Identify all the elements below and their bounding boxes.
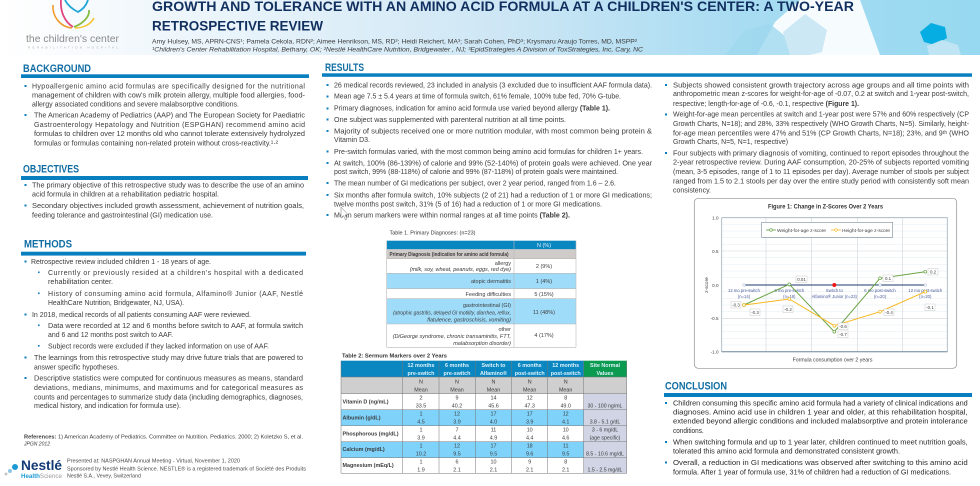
table 2 values: 1.9 xyxy=(417,468,425,474)
conclusion bullets: tolerated this amino acid formula and demonstrated consistent growth. xyxy=(673,449,900,456)
objectives bullets: Secondary objectives included growth assessment, achievement of nutrition goals, xyxy=(32,203,304,210)
results bullets, left column: Primary diagnoses, indication for amino acid formula use varied beyond allergy (Table 1). xyxy=(334,106,610,113)
methods bullets: History of consuming amino acid formula, Alfamino® Junior (AAF, Nestlé xyxy=(48,290,303,298)
table 1: primary diagnoses: 4 (17%) xyxy=(534,333,554,339)
conclusion bullets: conditions. xyxy=(673,428,704,435)
table 2 header row: Site Normal xyxy=(590,363,620,369)
table 2 row labels: Calcium (mg/dL) xyxy=(342,447,385,453)
table 2: serum markers xyxy=(341,354,627,474)
table 2 subheader row: Mean xyxy=(559,388,572,394)
table 2 values: 47.3 xyxy=(524,404,535,410)
table 2 values: 45.6 xyxy=(488,404,499,410)
table 2 values: 3.9 xyxy=(526,420,533,426)
table 2 header row xyxy=(408,363,620,377)
logo: nestle health science: Nestlé xyxy=(21,458,62,473)
y axis labels: -1.0 xyxy=(711,350,719,354)
table 1: primary diagnoses: gastrointestinal (GI) xyxy=(463,303,511,309)
table 2 row labels: Phosphorous (mg/dL) xyxy=(342,432,399,438)
footer disclosure: Sponsored by Nestlé Health Science. NESTLE® is a registered trademark of Société des Produits xyxy=(67,465,307,472)
authors and affiliations xyxy=(152,39,644,54)
table 2 header row: 12 months xyxy=(408,363,434,369)
conclusion bullets: Children consuming this specific amino acid formula had a variety of clinical indications and xyxy=(673,401,968,408)
methods bullets: counts and percentages to summarize study data (including demographics, diagnoses, xyxy=(34,394,303,401)
background bullets xyxy=(24,84,306,148)
table 1: primary diagnoses: malabsorption disorder) xyxy=(453,341,511,347)
results bullets, right column: ranged from 1.5 to 2.1 stools per day over the entire study period with consistently soft mean xyxy=(673,178,969,185)
data value callouts: 0.2 xyxy=(930,270,937,274)
x axis point labels: Alfamino® Junior (n=23) xyxy=(812,294,858,299)
table 2 values: 10 xyxy=(527,428,533,434)
table 2 values: 1 xyxy=(420,428,422,434)
table 2 row labels: Magnesium (mEq/L) xyxy=(342,463,394,469)
methods bullets: rehabilitation center. xyxy=(48,279,113,286)
x axis point labels: 12 mo post-switch xyxy=(908,288,943,293)
methods bullets: HealthCare Nutrition, Bridgewater, NJ, USA). xyxy=(48,300,184,307)
table 2 row labels: Vitamin D (ng/mL) xyxy=(342,400,389,406)
y axis labels: 0.0 xyxy=(712,283,719,288)
table 2 values: 11 xyxy=(563,444,569,450)
y axis title: z-score xyxy=(704,277,710,293)
results bullets, right column: Four subjects with primary diagnosis of vomiting, continued to report episodes throughout the xyxy=(673,150,969,157)
results bullets, left column: Pre-switch formulas varied, with the most common being amino acid formulas for children 1+ years. xyxy=(334,149,643,156)
table 1: primary diagnoses: N (%) xyxy=(537,243,551,249)
results bullets, right column: consistency. xyxy=(673,188,711,195)
header banner xyxy=(0,0,980,55)
table 1: primary diagnoses: Primary Diagnosis (indication for amino acid formula) xyxy=(390,252,509,258)
icon: mouse cursor xyxy=(341,207,348,220)
table 2 subheader row: Mean xyxy=(450,388,464,394)
methods bullets: The learnings from this retrospective study may drive future trials that are powered to xyxy=(34,355,303,362)
table 2 values: 9.5 xyxy=(490,452,497,458)
data value callouts: -0.1 xyxy=(926,305,934,310)
table 1: primary diagnoses: 11 (48%) xyxy=(533,310,555,316)
background bullets: management of children with cow's milk protein allergy, multiple food allergies, food- xyxy=(32,92,306,100)
title xyxy=(152,0,854,34)
results bullets, right column xyxy=(665,82,970,195)
results bullets, left column xyxy=(326,82,653,219)
table 2 header row: 12 months xyxy=(552,363,579,369)
logo: nestle health science: HealthScience xyxy=(21,474,63,480)
methods bullets: answer specific hypotheses. xyxy=(34,364,119,371)
results bullets, right column: respective; length-for-age of -0.6, -0.1, respective (Figure 1). xyxy=(673,101,859,108)
table 2 values: 2.1 xyxy=(490,468,497,474)
results bullets, left column: The mean number of GI medications per subject, over 2 year period, ranged from 1.6 – 2.6. xyxy=(334,180,616,187)
table 2 values: 9.6 xyxy=(526,452,533,458)
objectives bullets xyxy=(24,183,304,219)
background bullets: Gastroenterology Hepatology and Nutrition (ESPGHAN) recommend amino acid xyxy=(34,122,305,129)
table 2 values: 4.9 xyxy=(490,436,497,442)
logo: the children's center xyxy=(26,0,120,50)
background bullets: allergy associated conditions and severe malabsorptive conditions. xyxy=(32,102,239,108)
table 1: primary diagnoses: (DiGeorge syndrome, chronic transaminitis, FTT, xyxy=(393,334,511,340)
results bullets, left column: Six months after formula switch, 10% subjects (2 of 21) had a reduction of 1 or more GI medications; xyxy=(334,192,652,199)
table 2 values: 12 xyxy=(454,412,460,418)
y axis labels xyxy=(711,216,719,354)
table 2 values: 1 xyxy=(420,412,422,418)
table 2 normal values: 3.8 - 5.1 g/dL xyxy=(590,420,620,426)
methods bullets: deviations, medians, minimums, and maximums and for categorical measures as xyxy=(34,385,304,392)
results bullets, left column: One subject was supplemented with parenteral nutrition at all time points. xyxy=(334,117,566,124)
x axis point labels: (n=18) xyxy=(783,294,796,299)
results bullets, left column: At switch, 100% (86-139%) of calorie and 99% (52-140%) of protein goals were achieved. One year xyxy=(334,160,653,167)
methods bullets: Descriptive statistics were computed for continuous measures as means, standard xyxy=(34,376,303,383)
table 2: serum markers: Table 2: Sermum Markers over 2 Years xyxy=(342,354,447,360)
table 2 values: 9 xyxy=(528,460,531,466)
table 2 values: 1 xyxy=(420,444,422,450)
table 2 values: 12 xyxy=(563,412,569,418)
table 2 subheader row: N xyxy=(528,380,532,386)
table 2 values: 8 xyxy=(564,396,567,402)
table 2 values: 4.4 xyxy=(453,436,461,442)
table 2 values: 11 xyxy=(491,428,496,434)
results bullets, left column: Vitamin D3. xyxy=(334,137,370,144)
table 2 values: 4.4 xyxy=(526,436,533,442)
table 2 header row: pre-switch xyxy=(408,371,434,377)
table 2 values: 17 xyxy=(527,412,533,418)
table 2 values: 6 xyxy=(456,460,458,466)
results bullets, right column: anthropometric mean z-scores for weight-for-age of -0.07, 0.2 at switch and 1-year post-switch, xyxy=(673,91,969,98)
data value callouts: 0.01 xyxy=(797,277,806,282)
table 2 values: 2 xyxy=(420,396,422,402)
results bullets, right column: Growth Charts, N=18); and 28%, 33% respectively (WHO Growth Charts, N=5). Similarly, height- xyxy=(673,121,970,128)
x axis point labels: (n=20) xyxy=(919,294,932,299)
table 2 normal values xyxy=(586,404,624,474)
table 2 header row: post-switch xyxy=(551,371,581,377)
background bullets: formulas to children over 12 months old who cannot tolerate extensively hydrolyzed xyxy=(34,131,305,138)
results bullets, left column: post switch, 99% (88-118%) of calorie and 99% (87-118%) of protein goals were maintained. xyxy=(334,169,618,176)
table 2 values: 1 xyxy=(420,460,422,466)
table 2 header row: pre-switch xyxy=(444,371,470,377)
table 1: primary diagnoses: (milk, soy, wheat, peanuts, eggs, red dye) xyxy=(410,267,511,273)
legend: Height-for-age z-score xyxy=(842,228,890,234)
table 2 values: 10.2 xyxy=(416,452,426,458)
table 1: primary diagnoses: atopic dermatitis xyxy=(471,279,511,285)
table 2 values: 2.1 xyxy=(526,468,533,474)
methods bullets: medical history, and indication for formula use). xyxy=(34,403,181,410)
table 1: primary diagnoses: (atrophic gastritis, delayed GI motility, diarrhea, reflux, xyxy=(393,310,511,316)
table 2 normal values: 1.5 - 2.5 mg/dL xyxy=(588,468,623,474)
table 2 subheader row: Mean xyxy=(414,388,428,394)
legend: Weight-for-age z-score xyxy=(777,228,826,234)
x axis point labels: 12 mo pre-switch xyxy=(728,288,761,293)
table 2 values: 10 xyxy=(490,460,496,466)
table 1: primary diagnoses: 1 (4%) xyxy=(536,279,552,285)
table 2 values: 3.9 xyxy=(453,420,461,426)
title: RETROSPECTIVE REVIEW xyxy=(152,18,324,34)
results bullets, right column: Weight-for-age mean percentiles at switch and 1-year post were 57% and 60% respectively (CP xyxy=(673,112,969,119)
table 2 subheader row: N xyxy=(492,380,496,386)
table 2 normal values: 30 - 100 ng/mL xyxy=(588,404,623,410)
table 2 values: 9.5 xyxy=(562,452,569,458)
x axis point labels: (n=20) xyxy=(874,294,887,299)
heading: background: BACKGROUND xyxy=(23,63,91,75)
table 2 values: 17 xyxy=(490,412,496,418)
table 2 values: 2.1 xyxy=(453,468,461,474)
panel: background xyxy=(21,63,309,148)
table 1: primary diagnoses: other xyxy=(498,327,511,333)
table 2 header row: 6 months xyxy=(445,363,469,369)
panel: objectives xyxy=(21,164,308,219)
authors and affiliations: ¹Children's Center Rehabilitation Hospital, Bethany, OK; ²Nestlé HealthCare Nutrition, Bridgewater , NJ; ³EpidStrategies A Division of ToxStrategies, Inc, Cary, NC xyxy=(152,48,644,54)
conclusion bullets: When switching formula and up to 1 year later, children continued to meet nutrition goals, xyxy=(673,439,968,446)
x axis point labels: Switch to xyxy=(826,288,843,293)
results bullets, left column: twelve months post switch, 31% (5 of 16) had a reduction of 1 or more GI medications. xyxy=(334,202,602,209)
table 2 values: 12 xyxy=(527,396,533,402)
table 2 values: 10 xyxy=(563,428,569,434)
table 2 values: 4.1 xyxy=(562,420,569,426)
table 2 values: 49.0 xyxy=(560,404,571,410)
table 2 values: 8 xyxy=(564,460,567,466)
panel: conclusion xyxy=(664,381,972,476)
chart gridlines and axes xyxy=(722,218,947,352)
table 2 row labels xyxy=(342,400,399,469)
table 1: primary diagnoses xyxy=(387,231,576,347)
table 2 values: 2.1 xyxy=(562,468,569,474)
x axis point labels: 6 mo post-switch xyxy=(864,288,896,293)
height-for-age series xyxy=(743,290,927,327)
table 2 values: 4.0 xyxy=(490,420,497,426)
logo: the children's center: REHABILITATION HOSPITAL xyxy=(28,46,118,50)
table 1: primary diagnoses: allergy xyxy=(495,261,511,267)
results bullets, left column: Mean serum markers were within normal ranges at all time points (Table 2). xyxy=(334,212,570,219)
data value callouts xyxy=(731,268,938,338)
data value callouts: -0.3 xyxy=(732,302,740,308)
table 2 normal values: (age specific) xyxy=(590,436,621,442)
heading: objectives: OBJECTIVES xyxy=(23,164,79,176)
footer disclosure xyxy=(67,459,307,480)
objectives bullets: The primary objective of this retrospective study was to describe the use of an amino xyxy=(32,183,304,190)
data value callouts: -0.2 xyxy=(784,307,792,312)
methods bullets xyxy=(24,259,304,410)
table 2 normal values: 3 - 6 mg/dL xyxy=(592,428,618,434)
panel: results xyxy=(322,62,972,220)
table 1: primary diagnoses: Feeding difficulties xyxy=(466,292,511,298)
data value callouts: -0.6 xyxy=(839,324,847,329)
table 2 normal values: 8.5 - 10.6 mg/dL xyxy=(586,452,624,458)
methods bullets: and 6 and 12 months post switch to AAF. xyxy=(48,332,173,339)
results bullets, left column: Mean age 7.5 ± 5.4 years at time of formula switch, 61% female, 100% tube fed, 70% G-tube. xyxy=(334,94,621,101)
results bullets, right column: (mean, 3-5 episodes, range of 1 to 11 episodes per day). Average number of stools per subject xyxy=(673,169,969,176)
table 2 values: 14 xyxy=(490,396,496,402)
results bullets, left column: Majority of subjects received one or more nutrition modular, with most common being protein & xyxy=(334,128,652,135)
background bullets: The American Academy of Pediatrics (AAP) and The European Society for Paediatric xyxy=(34,112,306,120)
footer disclosure: Nestlé S.A., Vevey, Switzerland xyxy=(67,474,141,480)
logo: the children's center: the children's center xyxy=(26,34,120,45)
x axis title: Formula consumption over 2 years xyxy=(793,358,873,364)
data value callouts: 0.1 xyxy=(885,276,892,281)
methods bullets: Subject records were excluded if they lacked information on use of AAF. xyxy=(48,344,269,351)
table 2 header row: Alfamino® xyxy=(480,370,507,377)
table 2 header row: Switch to xyxy=(482,363,506,369)
objectives bullets: acid formula in children at a rehabilitation pediatric hospital. xyxy=(32,192,219,199)
x axis point labels: (n=14) xyxy=(738,294,751,299)
data value callouts: -0.4 xyxy=(885,310,893,315)
results bullets, right column: Subjects showed consistent growth trajectory across age groups and all time points with xyxy=(673,82,969,89)
table 2 subheader row xyxy=(414,380,572,394)
references xyxy=(23,434,303,448)
table 1: primary diagnoses: Table 1. Primary Diagnoses: (n=23) xyxy=(390,231,476,237)
methods bullets: In 2018, medical records of all patients consuming AAF were reviewed. xyxy=(32,312,251,319)
table 2 header row: 6 months xyxy=(518,363,542,369)
objectives bullets: feeding tolerance and gastrointestinal (GI) medication use. xyxy=(32,212,213,219)
table 2 values: 12 xyxy=(454,444,460,450)
table 2 values: 4.6 xyxy=(562,436,569,442)
results bullets, right column: 2-year retrospective review. During AAF consumption, 20-25% of subjects reported vomiting xyxy=(673,160,969,167)
conclusion bullets: formula. After 1 year of formula use, 31% of children had a reduction of GI medications. xyxy=(673,469,951,476)
heading: methods: METHODS xyxy=(24,239,72,251)
methods bullets: Data were recorded at 12 and 6 months before switch to AAF, at formula switch xyxy=(48,323,303,330)
chart title: Figure 1: Change in Z-Scores Over 2 Years xyxy=(768,203,883,210)
references: References: 1) American Academy of Pediatrics. Committee on Nutrition. Pediatrics. 2000; 2) Koletzko S, et al. xyxy=(24,434,303,440)
legend xyxy=(762,222,893,237)
table 2 values: 9.5 xyxy=(453,452,461,458)
background bullets: Hypoallergenic amino acid formulas are specifically designed for the nutritional xyxy=(32,84,305,90)
results bullets, left column: 26 medical records reviewed, 23 included in analysis (3 excluded due to insufficient AAF formula data). xyxy=(334,82,652,89)
y axis labels: -0.5 xyxy=(711,316,719,321)
weight-for-age series xyxy=(743,270,927,333)
table 2 subheader row: Mean xyxy=(487,388,500,394)
panel: figure 1 line chart xyxy=(694,198,957,368)
table 2 values: 7 xyxy=(456,428,458,434)
conclusion bullets xyxy=(665,401,968,476)
table 2 values: 40.2 xyxy=(452,404,462,410)
authors and affiliations: Amy Hulsey, MS, APRN-CNS¹; Pamela Cekola, RDN²; Aimee Henrikson, MS, RD²; Heidi Reichert, MA³; Sarah Cohen, PhD³; Krysmaru Araujo Torres, MD, MSPP² xyxy=(152,39,637,45)
table 2 header row: Values xyxy=(596,371,614,377)
conclusion bullets: Overall, a reduction in GI medications was observed after switching to this amino acid xyxy=(673,460,968,467)
footer disclosure: Presented at: NASPGHAN Annual Meeting - Virtual, November 1, 2020 xyxy=(67,459,240,465)
table 2 values: 33.5 xyxy=(416,404,426,410)
table 2 values xyxy=(416,396,571,474)
table 2 subheader row: N xyxy=(455,380,459,386)
table 2 values: 9 xyxy=(456,396,458,402)
heading: conclusion: CONCLUSION xyxy=(665,381,727,393)
table 1: primary diagnoses: 5 (15%) xyxy=(534,292,554,298)
results bullets, right column: for-age mean percentiles were 47% and 51% (CP Growth Charts, N=18); 23%, and 9ᵗʰ (WHO xyxy=(673,130,970,137)
table 2 subheader row: N xyxy=(419,380,423,386)
references: JPGN 2012 xyxy=(23,442,50,448)
table 2 values: 3.9 xyxy=(417,436,425,442)
y axis labels: 0.5 xyxy=(712,249,719,254)
data value callouts: -0.7 xyxy=(839,332,847,337)
table 2 values: 4.5 xyxy=(417,420,425,426)
table 2 header row: post-switch xyxy=(515,371,545,377)
heading: results: RESULTS xyxy=(325,62,364,74)
table 1: primary diagnoses: flatulence, gastroschisis, vomiting) xyxy=(427,318,511,324)
logo: nestle health science xyxy=(4,458,63,480)
methods bullets: Retrospective review included children 1 - 18 years of age. xyxy=(31,259,211,266)
y axis labels: 1.0 xyxy=(712,216,719,220)
conclusion bullets: extended beyond allergic conditions and included malabsorptive and protein intolerance xyxy=(673,419,968,426)
table 2 values: 18 xyxy=(527,444,533,450)
conclusion bullets: diagnoses. Amino acid use in children 1 year and older, at this rehabilitation hospital, xyxy=(673,409,968,416)
panel: methods xyxy=(21,239,306,410)
zero reference line with time points xyxy=(743,283,927,287)
table 2 subheader row: N xyxy=(564,380,568,386)
results bullets, right column: Growth Charts, N=5, N=1, respective) xyxy=(673,139,788,146)
data value callouts: -0.3 xyxy=(751,310,759,315)
table 1: primary diagnoses: 2 (9%) xyxy=(536,264,552,270)
background bullets: formulas or formulas containing non-related protein without cross-reactivity.¹·² xyxy=(34,140,279,148)
table 2 subheader row: Mean xyxy=(523,388,536,394)
table 2 row labels: Albumin (g/dL) xyxy=(342,416,381,422)
methods bullets: Currently or previously resided at a children's hospital with a dedicated xyxy=(48,270,303,277)
x axis point labels: 6 mo pre-switch xyxy=(775,288,805,293)
table 2 values: 17 xyxy=(490,444,496,450)
x axis point labels xyxy=(728,288,943,299)
